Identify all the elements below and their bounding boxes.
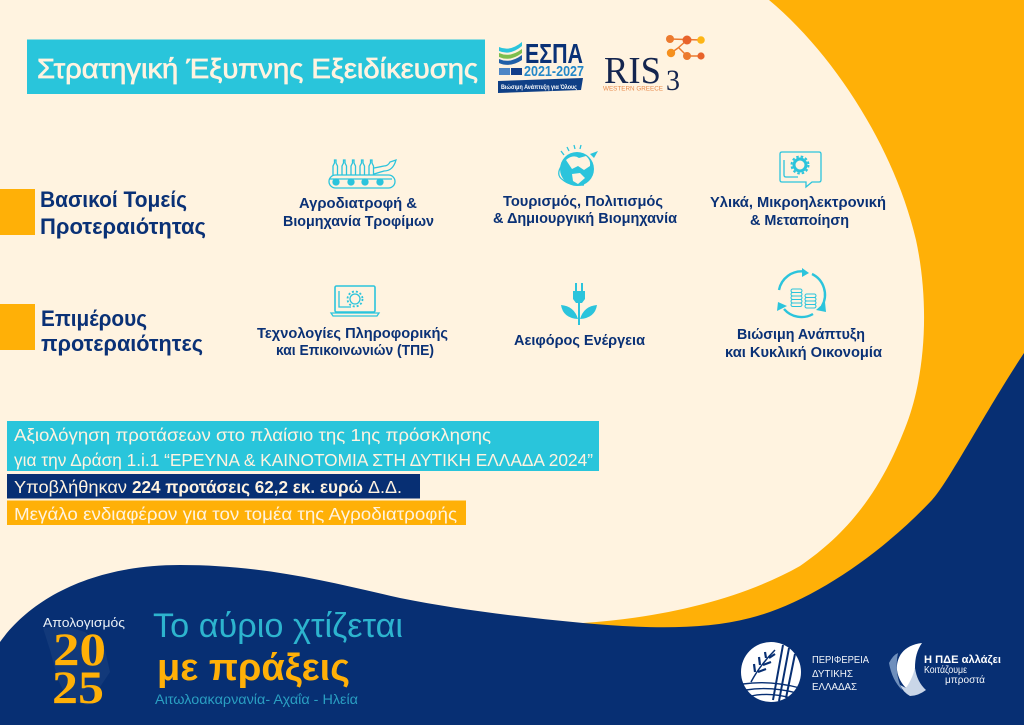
icon: plug with leaves — [561, 283, 597, 325]
callout: submitted proposals — [7, 474, 420, 498]
label: Αγροδιατροφή & Βιομηχανία Τροφίμων: Αγροδιατροφή & — [299, 196, 418, 212]
row heading: Επιμέρους προτεραιότητες — [0, 304, 203, 356]
label: Υλικά, Μικροηλεκτρονική & Μεταποίηση: Υλικά, Μικροηλεκτρονική — [710, 195, 886, 211]
callout: agri-food interest: Μεγάλο ενδιαφέρον για τον τομέα της Αγροδιατροφής — [14, 504, 457, 524]
badge: Απολογισμός 2025: Απολογισμός — [43, 615, 125, 630]
badge: Απολογισμός 2025: 20 — [53, 624, 106, 676]
row heading: Επιμέρους προτεραιότητες: προτεραιότητες — [41, 331, 203, 356]
label: Τεχνολογίες Πληροφορικής και Επικοινωνιών (ΤΠΕ) — [257, 326, 448, 359]
label: Υλικά, Μικροηλεκτρονική & Μεταποίηση: & Μεταποίηση — [750, 213, 849, 229]
logo: Η ΠΔΕ αλλάζει: Η ΠΔΕ αλλάζει — [924, 654, 1001, 666]
slogan: Το αύριο χτίζεται με πράξεις — [153, 607, 403, 707]
label: Τεχνολογίες Πληροφορικής και Επικοινωνιών (ΤΠΕ): Τεχνολογίες Πληροφορικής — [257, 326, 448, 342]
label: Υλικά, Μικροηλεκτρονική & Μεταποίηση — [710, 195, 886, 229]
slogan: Το αύριο χτίζεται με πράξεις: με πράξεις — [157, 647, 350, 689]
icon: globe with plane — [559, 145, 598, 186]
label: Αγροδιατροφή & Βιομηχανία Τροφίμων: Βιομηχανία Τροφίμων — [283, 214, 434, 230]
label: Τουρισμός, Πολιτισμός & Δημιουργική Βιομηχανία: Τουρισμός, Πολιτισμός — [503, 194, 663, 210]
logo: ESPA 2021-2027: ΕΣΠΑ — [525, 38, 583, 69]
slogan: Το αύριο χτίζεται με πράξεις: Αιτωλοακαρνανία- Αχαΐα - Ηλεία — [155, 691, 358, 707]
label: Τεχνολογίες Πληροφορικής και Επικοινωνιών (ΤΠΕ): και Επικοινωνιών (ΤΠΕ) — [276, 343, 434, 359]
logo: RIS3 Western Greece — [603, 35, 705, 97]
callout: call for proposals: Αξιολόγηση προτάσεων στο πλαίσιο της 1ης πρόσκλησης — [14, 425, 491, 445]
icon: conveyor with bottles — [329, 160, 396, 188]
callout: call for proposals — [7, 421, 599, 471]
label: Τουρισμός, Πολιτισμός & Δημιουργική Βιομηχανία — [493, 194, 677, 227]
label: Τουρισμός, Πολιτισμός & Δημιουργική Βιομηχανία: & Δημιουργική Βιομηχανία — [493, 211, 677, 227]
background: navy curved band — [0, 353, 1024, 725]
badge: Απολογισμός 2025 — [43, 615, 125, 714]
logo: Περιφέρεια Δυτικής Ελλάδας: ΠΕΡΙΦΕΡΕΙΑ — [812, 654, 869, 666]
icon: laptop with gear — [331, 286, 379, 316]
icon: speech bubble with gear — [780, 152, 821, 187]
logo: Η ΠΔΕ αλλάζει: Κοιτάζουμε — [924, 664, 967, 676]
callout: call for proposals: για την Δράση 1.i.1 “ΕΡΕΥΝΑ & ΚΑΙΝΟΤΟΜΙΑ ΣΤΗ ΔΥΤΙΚΗ ΕΛΛΑΔΑ 2024” — [14, 450, 593, 470]
logo: ESPA 2021-2027: Βιώσιμη Ανάπτυξη για Όλους — [501, 85, 577, 91]
background: orange curved band — [583, 0, 1024, 725]
callout: submitted proposals: 224 προτάσεις 62,2 εκ. ευρώ — [132, 477, 363, 497]
logo: Η ΠΔΕ αλλάζει — [889, 643, 1001, 696]
row heading: Βασικοί Τομείς Προτεραιότητας: Προτεραιότητας — [40, 214, 206, 239]
logo: Η ΠΔΕ αλλάζει: μπροστά — [945, 674, 985, 686]
logo: Περιφέρεια Δυτικής Ελλάδας: ΔΥΤΙΚΗΣ — [812, 668, 853, 680]
logo: ESPA 2021-2027 — [498, 38, 584, 93]
title banner — [27, 40, 485, 94]
logo: Περιφέρεια Δυτικής Ελλάδας — [741, 642, 869, 702]
logo: RIS3 Western Greece: RIS — [604, 50, 661, 92]
badge: Απολογισμός 2025: 25 — [52, 662, 104, 714]
label: Αειφόρος Ενέργεια: Αειφόρος Ενέργεια — [514, 333, 645, 349]
callout: submitted proposals: Υποβλήθηκαν — [14, 477, 127, 497]
title banner: Στρατηγική Έξυπνης Εξειδίκευσης — [37, 53, 478, 84]
row heading: Βασικοί Τομείς Προτεραιότητας: Βασικοί Τομείς — [40, 187, 187, 212]
logo: Περιφέρεια Δυτικής Ελλάδας: ΕΛΛΑΔΑΣ — [812, 681, 857, 693]
row heading: Βασικοί Τομείς Προτεραιότητας — [0, 187, 206, 239]
logo: RIS3 Western Greece: WESTERN GREECE — [603, 86, 663, 92]
label: Βιώσιμη Ανάπτυξη και Κυκλική Οικονομία — [725, 327, 882, 361]
row heading: Επιμέρους προτεραιότητες: Επιμέρους — [41, 306, 147, 331]
icon: cycle arrows with coins — [777, 268, 826, 317]
label: Βιώσιμη Ανάπτυξη και Κυκλική Οικονομία: Βιώσιμη Ανάπτυξη — [737, 327, 865, 343]
slogan: Το αύριο χτίζεται με πράξεις: Το αύριο χτίζεται — [153, 607, 403, 645]
callout: submitted proposals: Δ.Δ. — [368, 477, 402, 497]
label: Αγροδιατροφή & Βιομηχανία Τροφίμων — [283, 196, 434, 230]
logo: RIS3 Western Greece: 3 — [666, 64, 680, 97]
label: Βιώσιμη Ανάπτυξη και Κυκλική Οικονομία: και Κυκλική Οικονομία — [725, 345, 882, 361]
logo: ESPA 2021-2027: 2021-2027 — [524, 64, 584, 80]
